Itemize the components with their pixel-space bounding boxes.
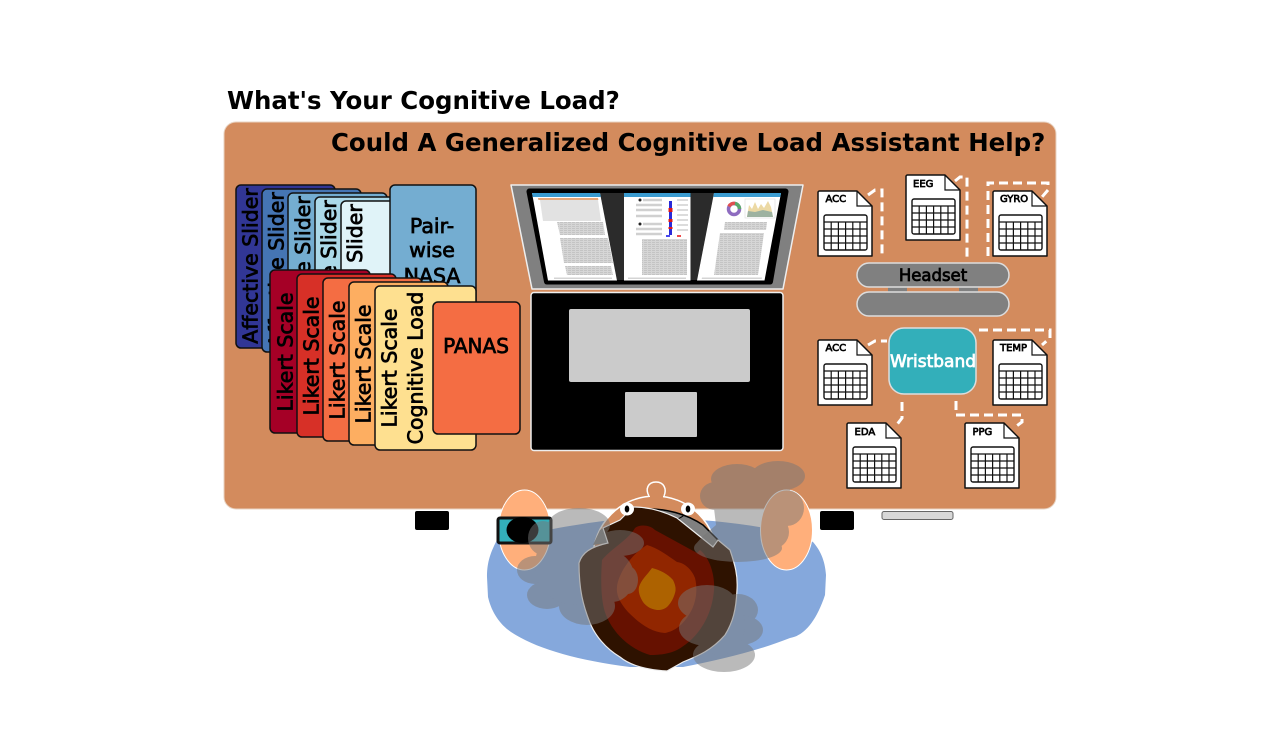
brain heat map bbox=[579, 507, 737, 671]
person body bbox=[487, 519, 826, 667]
cloud: upper right bbox=[694, 461, 805, 562]
document: ACC wristband: ACC bbox=[826, 343, 846, 354]
document: EEG: EEG bbox=[913, 179, 933, 190]
right hand bbox=[760, 490, 812, 570]
document: GYRO: GYRO bbox=[1000, 194, 1028, 205]
cards: slider questionnaires: Affective Slider bbox=[291, 196, 315, 352]
wristband on arm bbox=[498, 517, 551, 543]
cards: likert scale questionnaires: Likert Scale bbox=[300, 296, 324, 416]
card: pair-wise NASA: wise bbox=[409, 238, 455, 262]
document: ACC wristband bbox=[818, 340, 872, 405]
eyes bbox=[620, 502, 695, 516]
document: PPG: PPG bbox=[972, 427, 992, 438]
cards: likert scale questionnaires: Cognitive Load bbox=[404, 292, 428, 444]
brain layer: red bbox=[617, 545, 696, 633]
card: pair-wise NASA: NASA bbox=[404, 264, 460, 288]
document: ACC: ACC bbox=[826, 194, 846, 205]
cards: slider questionnaires: Affective Slider bbox=[317, 200, 341, 356]
keyboard bbox=[569, 309, 750, 382]
brain layer: orange core bbox=[639, 568, 676, 610]
paper: middle page bbox=[624, 193, 690, 280]
cards: slider questionnaires: Affective Slider bbox=[238, 188, 262, 344]
cards: slider questionnaires bbox=[236, 185, 440, 364]
card: PANAS bbox=[433, 302, 520, 434]
cards: likert scale questionnaires: Likert Scale bbox=[378, 308, 402, 428]
document: ACC bbox=[818, 191, 872, 256]
paper: right page bbox=[697, 193, 781, 280]
card: PANAS: PANAS bbox=[443, 334, 509, 358]
left hand bbox=[498, 490, 550, 570]
wristband bbox=[889, 328, 976, 394]
headset bbox=[857, 263, 1009, 316]
cards: slider questionnaires: Affective Slider bbox=[264, 192, 288, 348]
cloud: lower right bbox=[678, 585, 763, 672]
document: TEMP bbox=[993, 340, 1047, 405]
document: EEG bbox=[906, 175, 960, 240]
cloud: left bbox=[517, 508, 644, 625]
title: What's Your Cognitive Load? bbox=[227, 86, 620, 115]
connectors: wristband sensors bbox=[868, 330, 1050, 428]
cards: likert scale questionnaires bbox=[270, 270, 476, 450]
headset band bbox=[650, 509, 718, 548]
wristband: Wristband bbox=[890, 352, 976, 372]
panel: desk bbox=[224, 122, 1056, 509]
trackpad bbox=[625, 392, 697, 437]
laptop screen bbox=[511, 185, 803, 289]
document: EDA: EDA bbox=[854, 427, 875, 438]
document: GYRO bbox=[993, 191, 1047, 256]
cards: slider questionnaires: Affective Slider bbox=[343, 204, 367, 360]
mini area chart bbox=[745, 199, 775, 218]
donut chart bbox=[728, 204, 740, 214]
headset: Headset bbox=[899, 266, 968, 285]
heading: desk question: Could A Generalized Cognitive Load Assistant Help? bbox=[331, 128, 1045, 157]
cards: likert scale questionnaires: Likert Scale bbox=[352, 304, 376, 424]
card: pair-wise NASA bbox=[390, 185, 476, 320]
brain layer: dark red bbox=[601, 526, 714, 655]
thought clouds bbox=[517, 461, 805, 672]
paper: left page bbox=[532, 193, 617, 280]
laptop keyboard base bbox=[531, 292, 783, 450]
card: pair-wise NASA: Pair- bbox=[410, 214, 454, 238]
document: TEMP: TEMP bbox=[999, 343, 1027, 354]
connectors: headset sensors bbox=[868, 177, 1048, 257]
cards: likert scale questionnaires: Likert Scale bbox=[274, 292, 298, 412]
document: PPG bbox=[965, 423, 1019, 488]
document: EDA bbox=[847, 423, 901, 488]
desk feet and slot bbox=[415, 511, 953, 530]
cards: likert scale questionnaires: Likert Scale bbox=[326, 300, 350, 420]
person head bbox=[593, 482, 718, 620]
